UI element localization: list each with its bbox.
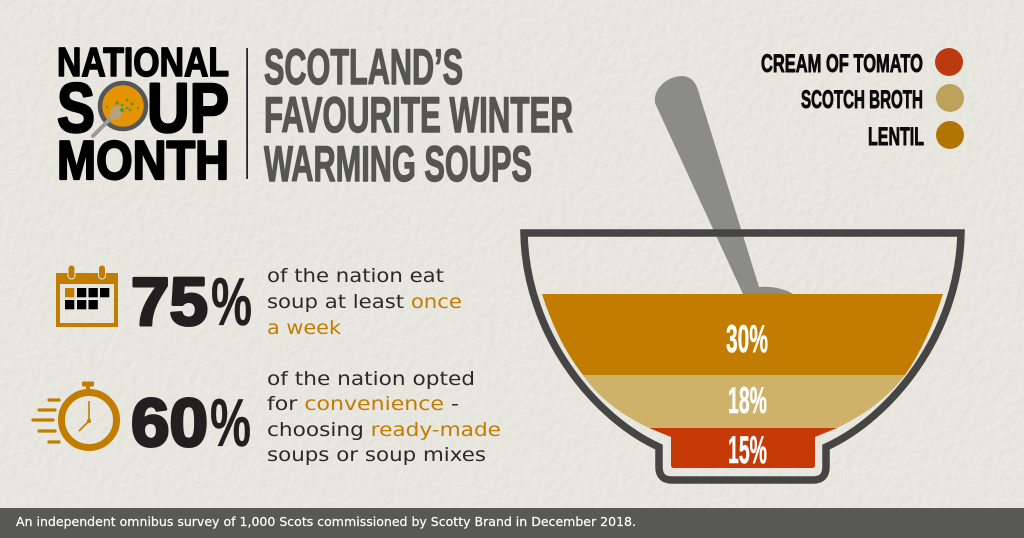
logo divider: [246, 48, 248, 179]
soup layer: lentil 30%: [542, 294, 943, 375]
footer bar: [0, 508, 1024, 538]
text: convenience: [267, 368, 501, 466]
text: convenience: soups or soup mixes: [267, 444, 486, 466]
soup bowl chart: 15%: [728, 429, 767, 472]
soup layer: scotch broth 18%: [583, 375, 905, 428]
value: lentil 30%: 30%: [726, 318, 768, 361]
text: once a week: a week: [267, 317, 341, 339]
legend: scotch broth: SCOTCH BROTH: [801, 86, 923, 114]
stat: 75%: 75: [131, 264, 208, 340]
stat: 60%: [131, 385, 251, 461]
text: convenience: of the nation opted: [267, 368, 475, 390]
logo: National Soup Month: MONTH: [57, 129, 229, 191]
title: WARMING SOUPS: [264, 136, 532, 192]
icon: stopwatch: [33, 382, 116, 448]
value: scotch broth 18%: 18%: [728, 380, 767, 421]
title: FAVOURITE WINTER: [264, 87, 573, 143]
stat: 75%: %: [211, 264, 252, 340]
icon: soup bowl in logo: [93, 80, 150, 136]
legend: cream of tomato: CREAM OF TOMATO: [761, 50, 923, 78]
logo: National Soup Month: S: [57, 69, 95, 147]
stat: 75%: [131, 264, 252, 340]
logo: National Soup Month: UP: [147, 69, 229, 147]
legend: [761, 48, 964, 151]
icon: calendar: [56, 265, 118, 327]
spoon: [655, 76, 793, 294]
stat: 60%: %: [210, 385, 251, 461]
legend: lentil: LENTIL: [868, 123, 924, 151]
text: convenience: for convenience -: [267, 393, 459, 415]
title: [264, 39, 573, 192]
soup bowl chart: [524, 233, 961, 480]
logo: National Soup Month: NATIONAL: [57, 39, 229, 85]
text: once a week: of the nation eat: [267, 265, 444, 287]
title: SCOTLAND’S: [264, 39, 463, 95]
footer bar: An independent omnibus survey of 1,000 Scots commissioned by Scotty Brand in December 2018.: [16, 514, 636, 529]
logo: National Soup Month: [57, 39, 229, 191]
bowl outline: [524, 233, 961, 480]
soup layer: cream of tomato 15%: [649, 428, 837, 468]
text: once a week: soup at least once: [267, 291, 462, 313]
text: convenience: choosing ready-made: [267, 419, 501, 441]
stat: 60%: 60: [131, 385, 208, 461]
text: once a week: [267, 265, 462, 339]
